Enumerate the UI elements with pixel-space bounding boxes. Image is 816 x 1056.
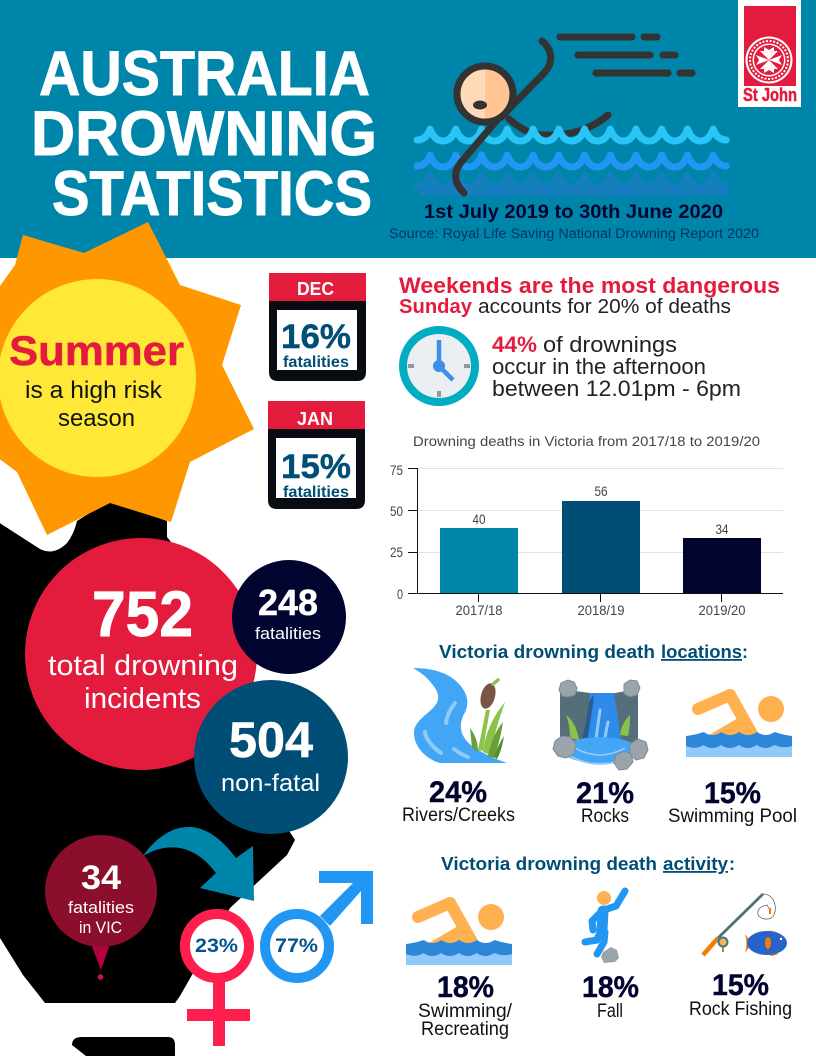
text: Sunday: Sunday xyxy=(399,296,473,318)
stat: rocks: 21% xyxy=(576,777,634,810)
panel: December calendar: 16% xyxy=(281,318,351,356)
stat: swimming pool: Swimming Pool xyxy=(668,806,797,827)
stat: swimming pool: 15% xyxy=(704,777,761,810)
title: DROWNING xyxy=(31,99,377,169)
stat: fall: 18% xyxy=(582,971,639,1004)
panel: fatalities: 248 xyxy=(258,582,318,623)
icon: male symbol: 77% xyxy=(275,936,318,957)
panel: December calendar: fatalities xyxy=(283,354,349,371)
title xyxy=(31,39,377,229)
title: STATISTICS xyxy=(52,159,372,229)
bar chart: 2017/18 xyxy=(456,603,502,618)
bar chart: 75 xyxy=(390,463,403,478)
heading: locations: Victoria drowning death xyxy=(439,642,655,662)
panel: total incidents: incidents xyxy=(84,683,201,715)
bar chart: 0 xyxy=(397,587,403,602)
stat: rock fishing: Rock Fishing xyxy=(689,999,792,1020)
panel: January calendar xyxy=(268,401,365,509)
summer text: is a high risk xyxy=(25,377,163,404)
icon: female symbol xyxy=(185,914,250,1046)
icon: swimmer xyxy=(406,903,512,965)
source: Source: Royal Life Saving National Drowning Report 2020 xyxy=(389,226,759,241)
heading: activity xyxy=(441,854,735,874)
bar chart: 50 xyxy=(390,504,403,519)
icon: falling person xyxy=(585,891,625,963)
icon: river with reeds xyxy=(413,668,507,763)
stat: swimming xyxy=(418,971,513,1040)
stat: rivers xyxy=(402,776,515,826)
panel: total incidents xyxy=(25,538,257,770)
panel: January calendar: 15% xyxy=(281,448,351,486)
icon: sun xyxy=(0,222,254,535)
panel: fatalities: fatalities xyxy=(255,624,321,643)
stat: rivers: 24% xyxy=(429,776,487,809)
panel: total incidents: 752 xyxy=(92,578,193,650)
text: afternoon stat: 44% xyxy=(492,332,537,357)
text: afternoon stat: between 12.01pm - 6pm xyxy=(492,376,741,401)
icon: drowning swimmer with waves xyxy=(417,37,728,196)
text: afternoon stat: of drownings xyxy=(543,332,677,357)
summer text: Summer xyxy=(9,327,184,374)
header band xyxy=(0,0,816,258)
chart title: Drowning deaths in Victoria from 2017/18 to 2019/20 xyxy=(413,434,760,449)
panel: Victoria fatalities pin: fatalities xyxy=(68,898,134,917)
panel: total incidents: total drowning xyxy=(48,650,238,682)
icon: swimmer in pool xyxy=(686,695,792,757)
stat: rock fishing: 15% xyxy=(712,969,769,1002)
panel: January calendar: JAN xyxy=(297,409,333,429)
date range: 1st July 2019 to 30th June 2020 xyxy=(424,202,723,223)
heading: locations: : xyxy=(742,642,748,662)
text: afternoon stat: occur in the afternoon xyxy=(492,354,706,379)
icon: male symbol xyxy=(265,871,373,978)
stat: swimming pool xyxy=(668,777,797,827)
heading: locations xyxy=(439,642,748,662)
bar chart: 34 xyxy=(716,522,729,537)
stat: swimming: Swimming/ xyxy=(418,1001,513,1022)
heading: activity: : xyxy=(729,854,735,874)
panel: non-fatal: non-fatal xyxy=(221,770,320,797)
text: afternoon stat xyxy=(492,332,741,401)
bar chart: 40 xyxy=(472,512,486,527)
stat: rocks: Rocks xyxy=(581,806,629,827)
stat: swimming: Recreating xyxy=(421,1019,509,1040)
bar chart: 2019/20 xyxy=(698,603,746,618)
bar chart: 56 xyxy=(594,484,608,499)
panel: fatalities xyxy=(232,560,346,674)
panel: Victoria fatalities pin: 34 xyxy=(81,859,121,897)
heading: weekends: Weekends are the most dangerous xyxy=(399,273,780,298)
arrow: to gender split xyxy=(143,827,254,901)
panel: December calendar xyxy=(269,273,366,381)
panel: January calendar: fatalities xyxy=(283,484,349,501)
stat: fall: Fall xyxy=(597,1001,623,1022)
bar chart: 2018/19 xyxy=(578,603,624,618)
sun disc xyxy=(0,279,196,477)
icon: St John logo xyxy=(738,0,801,107)
title: AUSTRALIA xyxy=(39,39,370,109)
summer text: season xyxy=(58,405,135,432)
icon: St John logo: St John xyxy=(743,85,797,105)
icon: clock xyxy=(403,330,475,402)
map of Victoria silhouette xyxy=(0,500,295,1056)
bar chart: 25 xyxy=(390,545,403,560)
stat: swimming: 18% xyxy=(437,971,494,1004)
stat: fall xyxy=(582,971,639,1022)
panel: December calendar: DEC xyxy=(297,279,334,299)
panel: non-fatal: 504 xyxy=(229,712,313,768)
panel: non-fatal xyxy=(194,680,348,834)
heading: activity: Victoria drowning death xyxy=(441,854,657,874)
summer text xyxy=(9,327,184,432)
heading: activity: activity xyxy=(663,854,728,874)
panel: Victoria fatalities pin xyxy=(45,835,157,980)
panel: summer sun xyxy=(0,222,254,535)
stat: rock fishing xyxy=(689,969,792,1020)
icon: female symbol: 23% xyxy=(195,936,238,957)
stat: rivers: Rivers/Creeks xyxy=(402,805,515,826)
text: Sunday: accounts for 20% of deaths xyxy=(478,296,731,318)
bar chart xyxy=(390,463,783,618)
icon: fishing rod and fish xyxy=(703,894,787,956)
heading: locations: locations xyxy=(661,642,742,662)
panel: Victoria fatalities pin: in VIC xyxy=(79,918,122,937)
icon: waterfall with rocks xyxy=(553,680,648,770)
stat: rocks xyxy=(576,777,634,827)
